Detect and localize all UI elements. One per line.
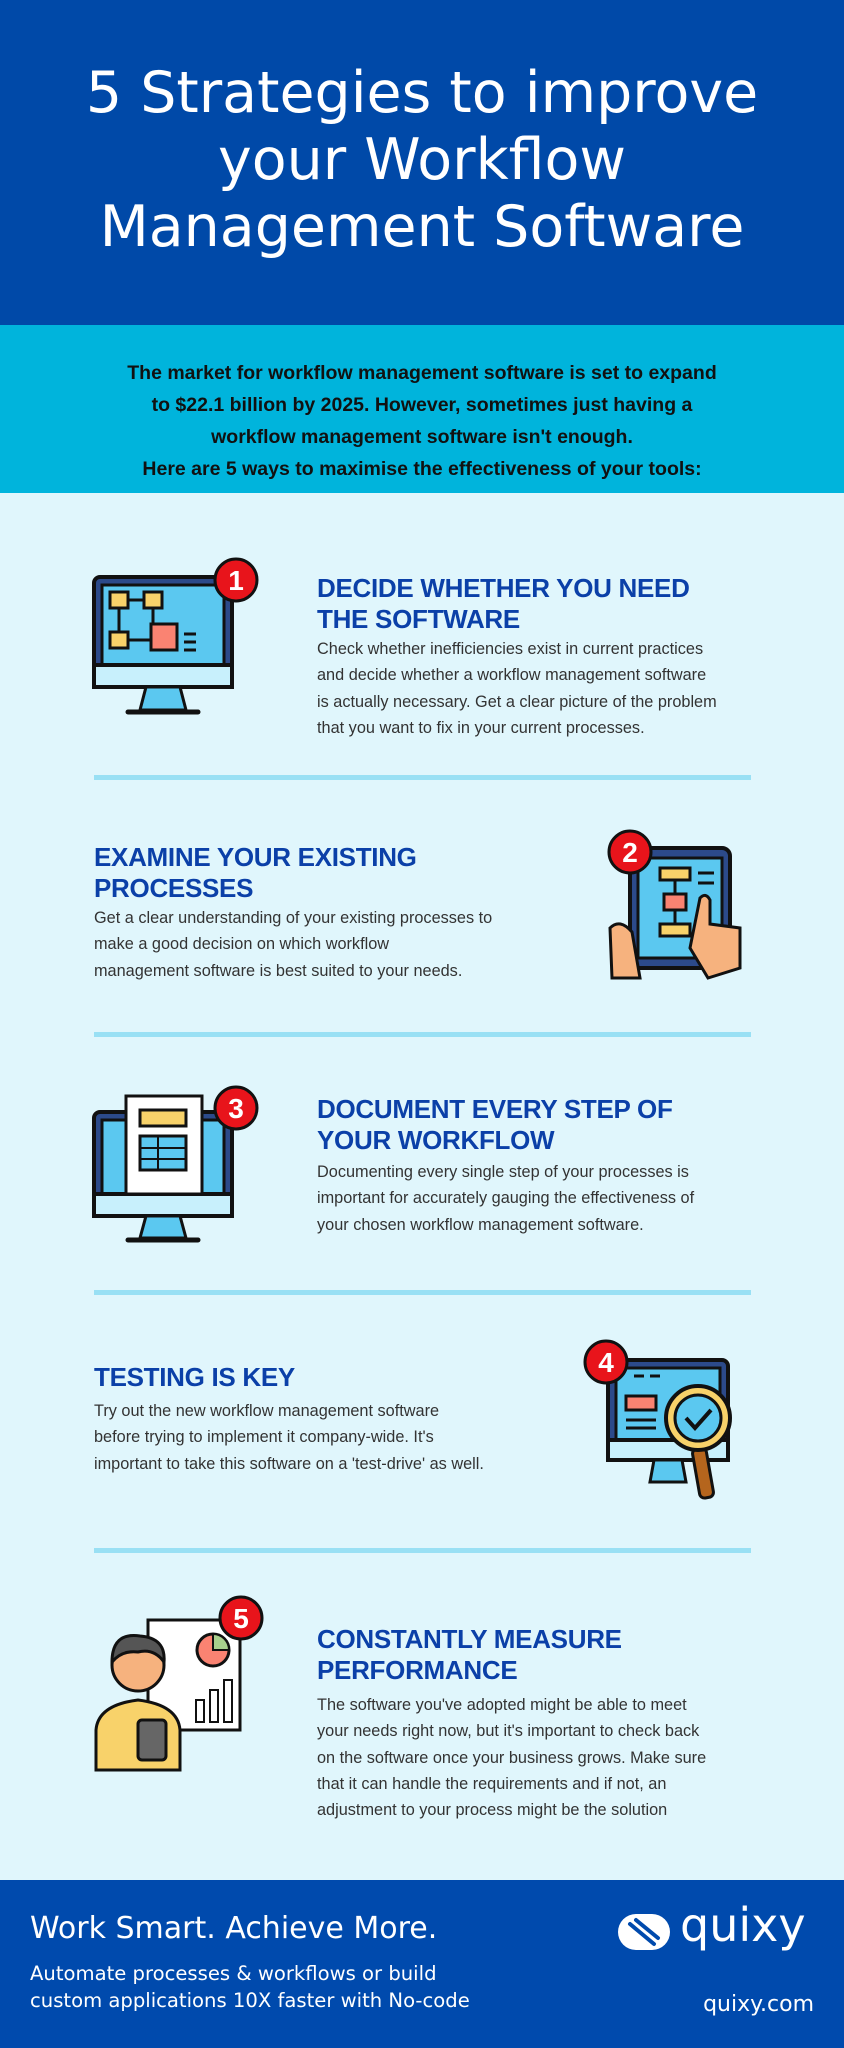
footer tagline: Work Smart. Achieve More. [30, 1911, 437, 1946]
body 2: make a good decision on which workflow [94, 935, 389, 953]
footer description [30, 1962, 470, 2012]
body 4: Try out the new workflow management software [94, 1402, 439, 1420]
intro band [0, 325, 844, 493]
intro text [127, 362, 717, 480]
body 4 [94, 1402, 484, 1473]
body 2: management software is best suited to your needs. [94, 962, 462, 980]
logo: quixy [618, 1898, 806, 1952]
heading 2: PROCESSES [94, 873, 253, 903]
body 5: adjustment to your process might be the solution [317, 1801, 667, 1819]
body 3: your chosen workflow management software. [317, 1216, 644, 1234]
icon: monitor magnifier 4: 4 [598, 1347, 614, 1378]
heading 5: CONSTANTLY MEASURE [317, 1624, 622, 1654]
heading 1: DECIDE WHETHER YOU NEED [317, 573, 690, 603]
body 5: The software you've adopted might be able to meet [317, 1696, 687, 1714]
body 2: Get a clear understanding of your existing processes to [94, 909, 492, 927]
icon: monitor flowchart 1: 1 [228, 565, 244, 596]
heading 3: YOUR WORKFLOW [317, 1125, 554, 1155]
icon: monitor document 3: 3 [228, 1093, 244, 1124]
heading 2 [94, 842, 417, 903]
body 1 [317, 640, 717, 737]
header band [0, 0, 844, 325]
body 1: is actually necessary. Get a clear picture of the problem [317, 693, 717, 711]
heading 5: PERFORMANCE [317, 1655, 517, 1685]
heading 1: THE SOFTWARE [317, 604, 520, 634]
intro text: workflow management software isn't enough. [211, 426, 633, 448]
body 1: and decide whether a workflow management software [317, 666, 706, 684]
body 5 [317, 1696, 706, 1819]
body 3: Documenting every single step of your processes is [317, 1163, 689, 1181]
heading 4: TESTING IS KEY [94, 1362, 295, 1392]
footer [0, 1880, 844, 2048]
body 4: before trying to implement it company-wide. It's [94, 1428, 434, 1446]
logo: quixy: quixy [680, 1898, 806, 1952]
body 1: Check whether inefficiencies exist in current practices [317, 640, 703, 658]
icon: monitor flowchart 1 [92, 558, 258, 714]
body 3 [317, 1163, 694, 1234]
icon: tablet with hands 2 [608, 830, 742, 980]
icon: tablet with hands 2: 2 [622, 837, 638, 868]
icon: person with chart 5 [94, 1596, 264, 1772]
heading 2: EXAMINE YOUR EXISTING [94, 842, 417, 872]
icon: monitor magnifier 4 [584, 1340, 732, 1500]
title: your Workflow [218, 127, 626, 193]
body 5: on the software once your business grows. Make sure [317, 1749, 706, 1767]
title [86, 60, 758, 260]
body 1: that you want to fix in your current processes. [317, 719, 645, 737]
title: 5 Strategies to improve [86, 60, 758, 126]
heading 1 [317, 573, 690, 634]
icon: monitor document 3 [92, 1086, 258, 1242]
heading 3 [317, 1094, 673, 1155]
icon: person with chart 5: 5 [233, 1603, 249, 1634]
body 2 [94, 909, 492, 980]
title: Management Software [100, 194, 744, 260]
intro text: The market for workflow management software is set to expand [127, 362, 717, 384]
footer description: custom applications 10X faster with No-code [30, 1989, 470, 2012]
heading 3: DOCUMENT EVERY STEP OF [317, 1094, 673, 1124]
intro text: Here are 5 ways to maximise the effectiveness of your tools: [142, 458, 702, 480]
footer url: quixy.com [703, 1992, 814, 2017]
body 4: important to take this software on a 'test-drive' as well. [94, 1455, 484, 1473]
body 3: important for accurately gauging the effectiveness of [317, 1189, 694, 1207]
body 5: that it can handle the requirements and if not, an [317, 1775, 666, 1793]
heading 5 [317, 1624, 622, 1685]
intro text: to $22.1 billion by 2025. However, sometimes just having a [152, 394, 692, 416]
body 5: your needs right now, but it's important to check back [317, 1722, 699, 1740]
footer description: Automate processes & workflows or build [30, 1962, 437, 1985]
